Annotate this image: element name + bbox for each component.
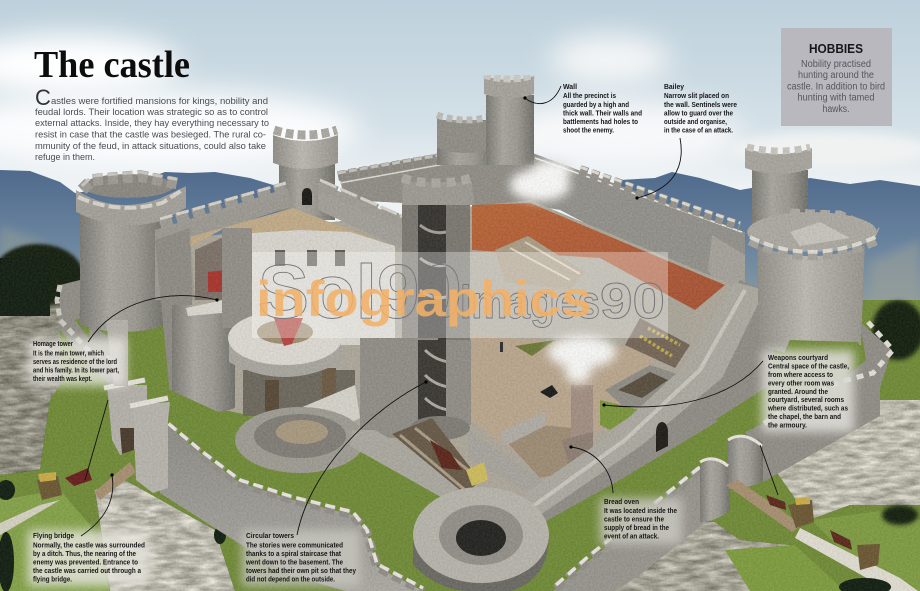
ground: grass and rock xyxy=(0,300,920,591)
inner terrace xyxy=(300,385,360,432)
label: bread oven: It was located inside the xyxy=(604,508,677,515)
rock lower right xyxy=(600,520,840,591)
left rear curved wall xyxy=(57,278,120,395)
label: homage tower: It is the main tower, which xyxy=(33,350,104,358)
rock right xyxy=(775,400,920,520)
label: bailey xyxy=(664,84,737,134)
label: bailey: in the case of an attack. xyxy=(664,128,733,134)
label: weapons courtyard xyxy=(767,355,849,430)
label: bread oven: event of an attack. xyxy=(604,534,659,540)
label: circular towers: The stories were communicated xyxy=(246,542,343,550)
intro text: refuge in them. xyxy=(35,151,95,162)
label: wall: All the precinct is xyxy=(563,93,616,100)
intro text: mmunity of the feud, in attack situations, could also take xyxy=(35,140,266,151)
label: bread oven xyxy=(604,499,677,540)
intro text: feudal lords. Their location was strategic so as to control xyxy=(35,106,268,117)
hobbies text xyxy=(787,59,885,115)
label: circular towers: did not depend on the outside. xyxy=(246,576,335,584)
hobbies text: hawks. xyxy=(822,104,850,115)
label: wall: thick wall. Their walls and xyxy=(563,110,642,118)
label: weapons courtyard: the chapel, the barn and xyxy=(768,414,841,421)
balcony turret xyxy=(228,311,355,416)
label: flying bridge: Normally, the castle was surrounded xyxy=(33,542,145,550)
courtyard rooms and garden xyxy=(468,318,690,500)
label: bailey: allow to guard over the xyxy=(664,110,733,118)
road left xyxy=(0,500,60,535)
sky with clouds xyxy=(0,0,920,270)
label: circular towers: towers had their own pit so that they xyxy=(246,568,356,575)
watermark panel xyxy=(252,252,668,338)
semi-circular base xyxy=(235,407,365,473)
label: flying bridge: enemy was prevented. Entrance to xyxy=(33,560,138,566)
flying bridges xyxy=(94,462,802,532)
road right xyxy=(795,528,918,591)
courtyard smoke xyxy=(548,336,616,383)
hobbies text: Nobility practised xyxy=(801,59,871,70)
intro text xyxy=(35,85,269,162)
label: weapons courtyard: from where access to xyxy=(768,372,833,379)
central keep with spiral stair xyxy=(360,178,474,440)
label: flying bridge: by a ditch. Thus, the nearing of the xyxy=(33,551,136,558)
label: bailey: outside and organise, xyxy=(664,119,727,126)
label: bailey: Bailey xyxy=(664,84,684,91)
label: homage tower: their wealth was kept. xyxy=(33,376,92,383)
outlined logo: 90 xyxy=(600,273,665,329)
gate towers and front curtain wall xyxy=(104,320,423,591)
title: The castle xyxy=(34,44,190,86)
big left tower xyxy=(76,172,186,332)
label: bread oven: castle to ensure the xyxy=(604,516,664,524)
label: weapons courtyard: every other room was xyxy=(768,380,834,388)
label: flying bridge: Flying bridge xyxy=(33,533,74,540)
label: homage tower: serves as residence of the lord xyxy=(33,359,117,366)
label: bailey: Narrow slit placed on xyxy=(664,93,729,100)
cut-away hall interior xyxy=(252,230,395,345)
label: bailey: the wall. Sentinels were xyxy=(664,102,737,109)
right towers xyxy=(745,147,878,355)
label: circular towers: went down to the basement. The xyxy=(245,560,343,566)
courtyard floor xyxy=(470,335,660,470)
label: homage tower: and his family. In its lower part, xyxy=(33,368,119,374)
rear walls xyxy=(338,152,745,300)
outlined logo: Sol90 xyxy=(258,250,462,335)
label: homage tower: Homage tower xyxy=(33,341,73,348)
round tower pit xyxy=(413,487,549,591)
label: weapons courtyard: granted. Around the xyxy=(768,389,828,396)
carts and horses xyxy=(37,468,880,570)
label: weapons courtyard: Central space of the castle, xyxy=(768,364,849,370)
label: flying bridge xyxy=(33,533,145,584)
label: weapons courtyard: where distributed, such as xyxy=(767,406,848,412)
mountains xyxy=(0,170,920,330)
right walkway and wall xyxy=(508,280,785,530)
label backing hazes xyxy=(28,338,854,586)
label: circular towers: thanks to a spiral staircase that xyxy=(246,551,342,558)
label: wall: battlements had holes to xyxy=(563,119,638,126)
callout lines xyxy=(81,86,778,536)
label: bread oven: supply of bread in the xyxy=(604,525,669,532)
tower two, back left xyxy=(273,130,338,220)
castle interior base xyxy=(170,200,745,520)
label: circular towers: Circular towers xyxy=(246,533,294,540)
rock left xyxy=(0,300,60,475)
label: wall xyxy=(563,84,642,134)
label: bread oven: Bread oven xyxy=(604,499,639,506)
rock bottom centre-left xyxy=(95,480,235,591)
label: flying bridge: flying bridge. xyxy=(33,576,72,584)
smoke xyxy=(510,160,572,201)
label: wall: Wall xyxy=(563,84,577,91)
right-front curtain wall and towers xyxy=(553,436,763,591)
round front-left tower xyxy=(172,228,252,414)
panel: hobbies xyxy=(781,28,892,126)
intro text: C xyxy=(35,85,51,110)
back centre towers xyxy=(437,75,534,165)
left-front walls and wooden floor xyxy=(155,180,405,412)
walkway to round tower xyxy=(350,430,495,520)
label: homage tower xyxy=(33,341,119,383)
label: weapons courtyard: Weapons courtyard xyxy=(768,355,828,362)
watermark: sol90images infographics xyxy=(252,250,668,338)
hobbies heading: HOBBIES xyxy=(809,41,863,56)
inner green lawn xyxy=(130,332,470,591)
label: flying bridge: the castle was carried out through a xyxy=(33,568,141,575)
hobbies text: castle. In addition to bird xyxy=(787,82,885,92)
label: circular towers xyxy=(245,533,356,584)
intro text: resist in case that the castle was besieged. The rural co- xyxy=(35,128,266,140)
dark trees xyxy=(0,243,920,591)
hobbies text: hunting with tamed xyxy=(798,92,874,104)
intro text: astles were fortified mansions for kings, nobility and xyxy=(51,95,268,106)
label: weapons courtyard: the armoury. xyxy=(768,422,807,430)
label: wall: shoot the enemy. xyxy=(563,128,614,134)
label: wall: guarded by a high and xyxy=(563,102,629,109)
stable room xyxy=(392,418,488,495)
intro text: external attacks. Inside, they hay everything necessary to xyxy=(35,117,269,128)
right curved outer wall xyxy=(715,322,893,482)
outlined logo: images xyxy=(460,276,600,328)
outlined logo xyxy=(258,250,665,335)
hobbies text: hunting around the xyxy=(798,70,874,81)
label: weapons courtyard: courtyard, several rooms xyxy=(768,397,844,404)
orange wordmark: infographics xyxy=(256,271,592,327)
red tiled roof and rafters xyxy=(472,203,725,345)
